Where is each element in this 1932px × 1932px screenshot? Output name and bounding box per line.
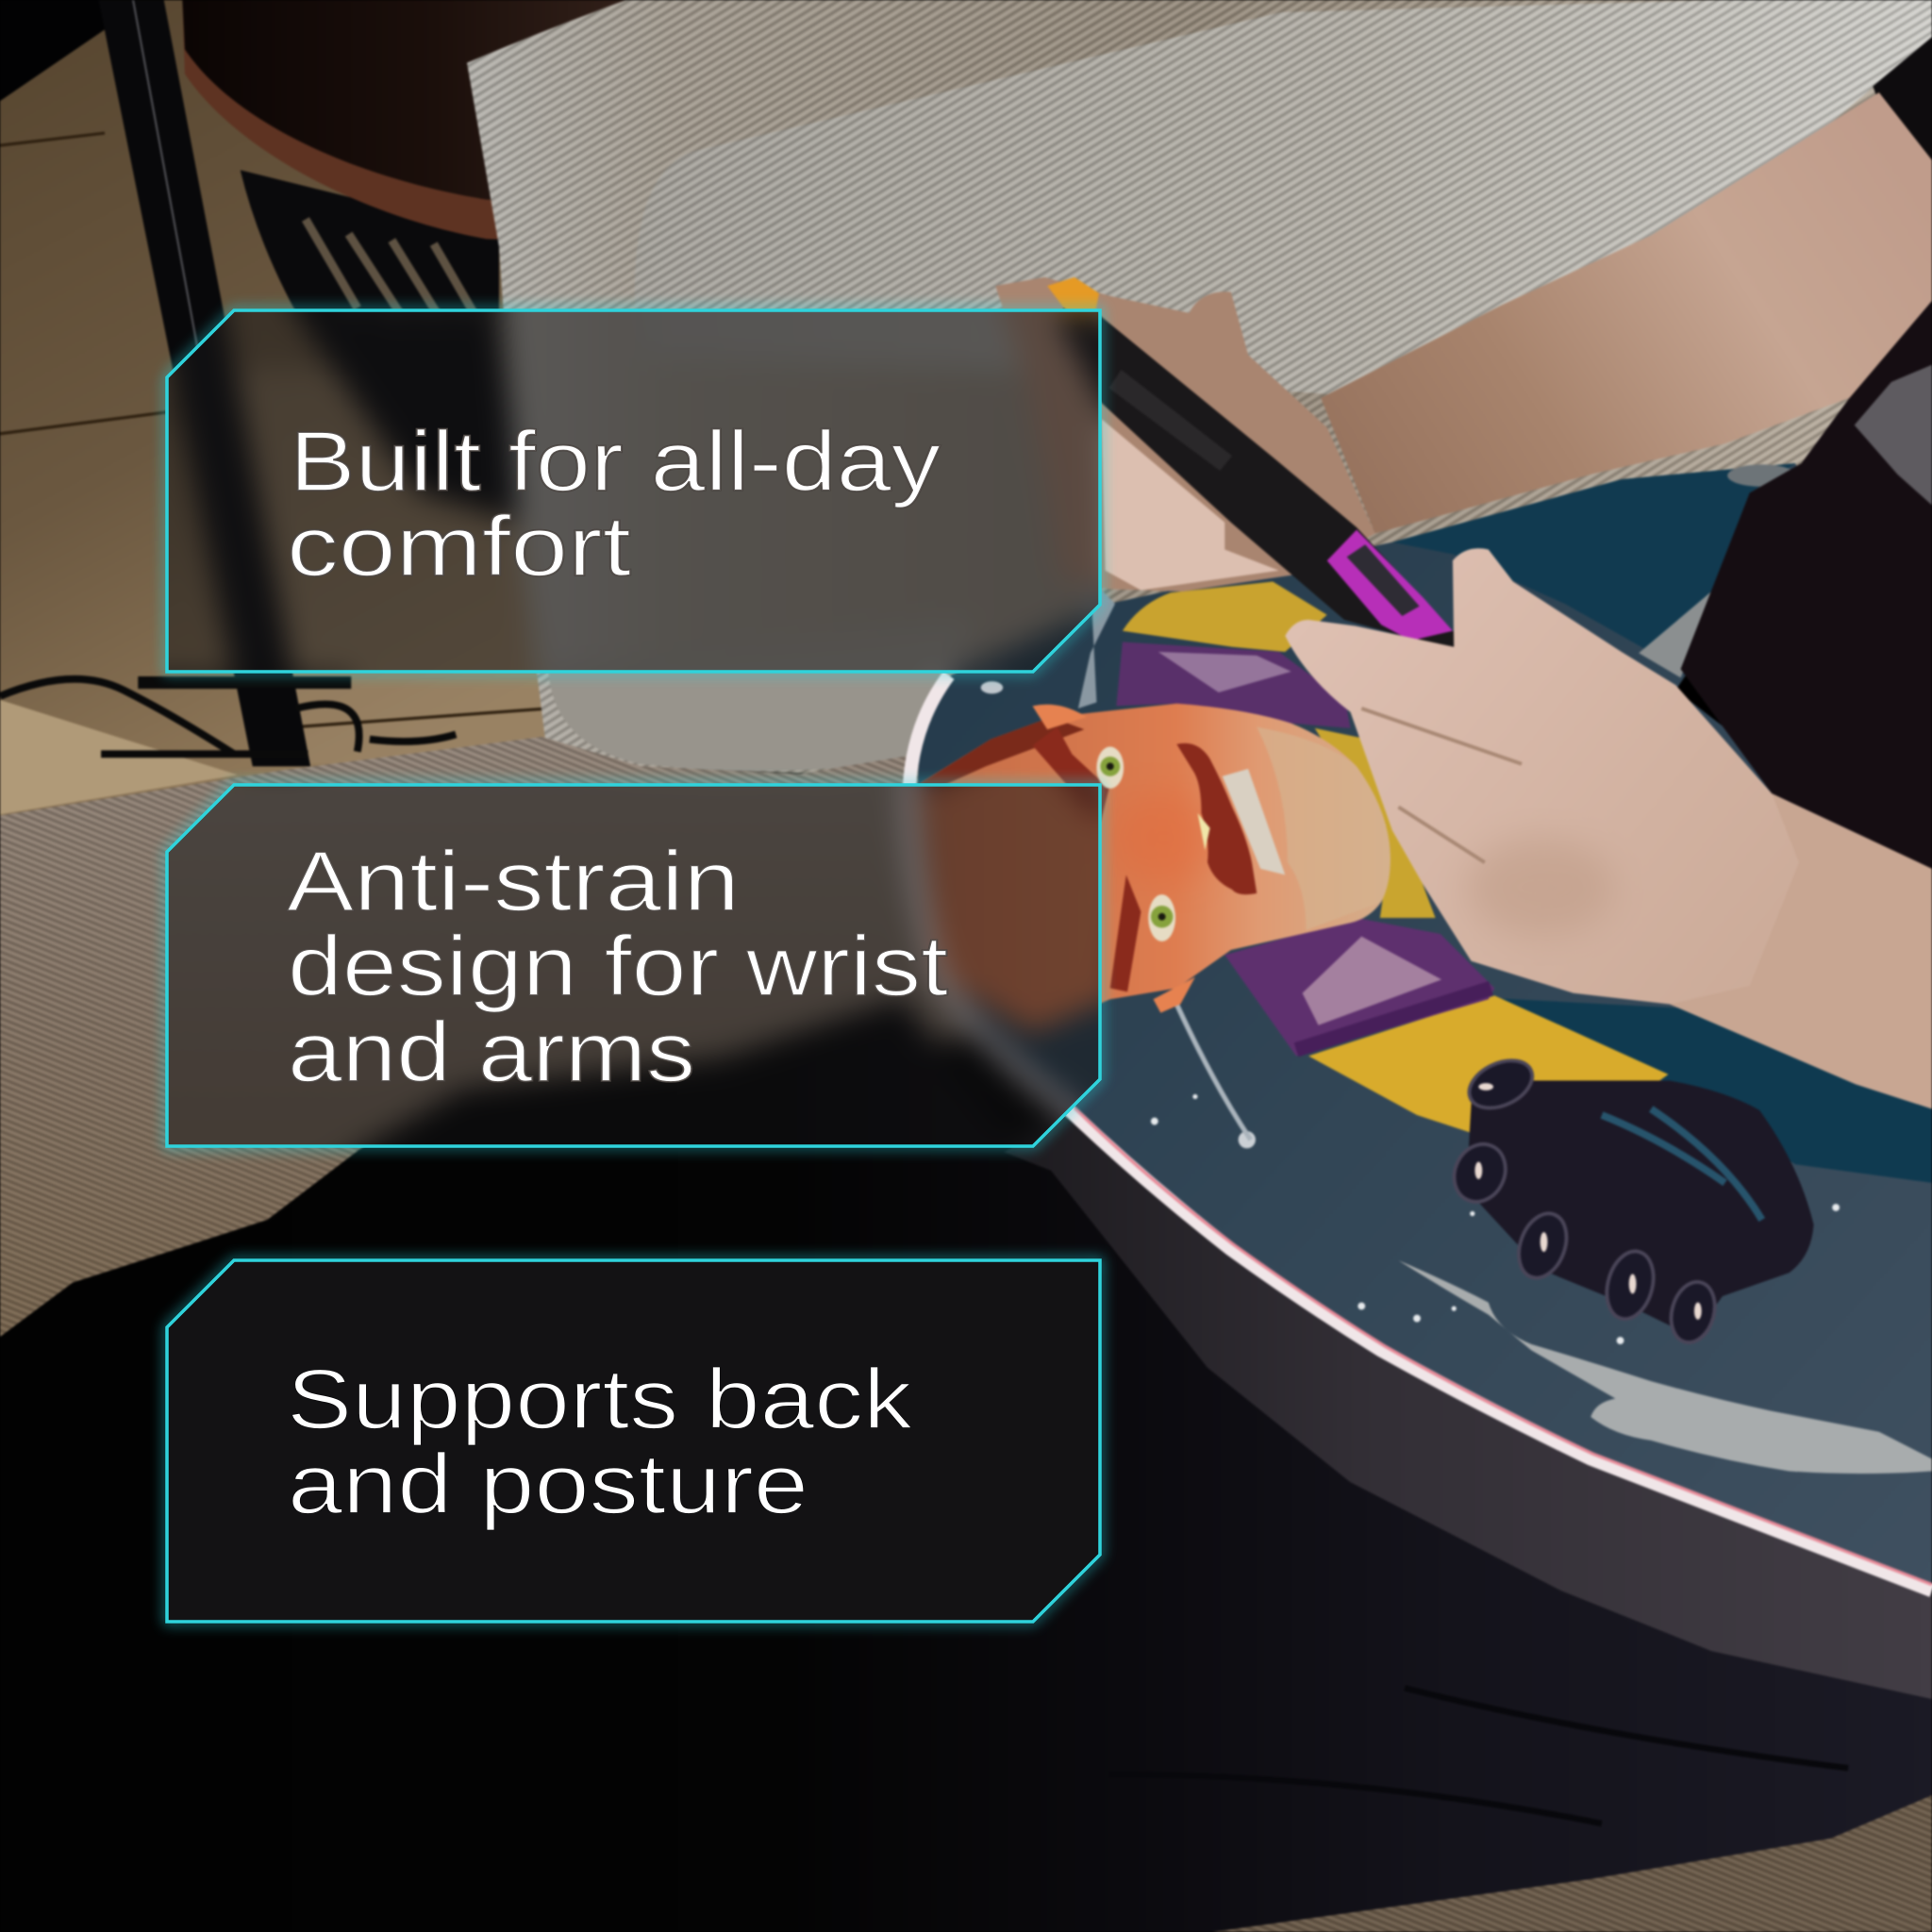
- brow: [1033, 727, 1109, 823]
- dark corner at top left: [0, 0, 105, 101]
- star print: [981, 579, 1840, 1344]
- grey dome on cushion: [1727, 464, 1796, 487]
- panel: anti-strain design: [156, 773, 1112, 1158]
- upper hand: [995, 277, 1375, 591]
- right eye: [1148, 894, 1175, 941]
- black shirt: [1681, 37, 1932, 869]
- text: built for all-day comfort: Built for all-day: [290, 415, 941, 509]
- floor tiles: [0, 0, 567, 862]
- pants: [0, 998, 1932, 1932]
- cushion body: [918, 463, 1932, 1591]
- left eye: [1096, 747, 1124, 789]
- cloud print: [1398, 1260, 1932, 1474]
- teeth: [1223, 769, 1285, 874]
- controller: [1047, 277, 1484, 658]
- text: supports back and posture: and posture: [288, 1438, 808, 1532]
- cushion trim: [909, 675, 1932, 1591]
- yellow collar: [1315, 728, 1436, 918]
- text: anti-strain design for wrist and arms: [287, 835, 948, 1100]
- text: anti-strain design for wrist and arms: Anti-strain: [287, 835, 740, 929]
- cheek red: [1112, 791, 1216, 885]
- lower hand: [1285, 548, 1799, 1004]
- fingers below controller: [1102, 419, 1279, 591]
- purple vest top: [1116, 641, 1351, 728]
- nose highlight: [1198, 813, 1210, 850]
- upper forearm: [1321, 92, 1932, 534]
- yellow sleeve top: [1123, 581, 1327, 652]
- table leg: [98, 0, 310, 766]
- sofa seat: [0, 737, 986, 1337]
- velvet cushion side: [1004, 1112, 1932, 1699]
- teal band behind hands: [1392, 463, 1795, 669]
- panel: supports back and posture: [160, 1255, 1113, 1632]
- text: supports back and posture: [287, 1353, 913, 1532]
- lower forearm: [1651, 793, 1932, 1109]
- mustache: [1176, 743, 1257, 894]
- panel: all-day comfort: [155, 298, 1112, 684]
- chin highlight: [1257, 727, 1391, 930]
- pillow base: [548, 616, 974, 771]
- yellow sleeve lower: [1308, 995, 1668, 1158]
- purple vest lower: [1224, 918, 1494, 1056]
- round side table: [182, 0, 641, 242]
- sofa corner at bottom right: [1212, 1795, 1932, 1932]
- teal band under forearm: [1491, 998, 1932, 1183]
- illustrated face: [918, 704, 1391, 1033]
- knuckle shading: [1466, 838, 1614, 937]
- text: built for all-day comfort: comfort: [287, 500, 631, 594]
- front cushion: [635, 0, 1932, 394]
- text: anti-strain design for wrist and arms: design for wrist: [288, 920, 948, 1014]
- pants creases: [1109, 1688, 1848, 1824]
- text: built for all-day comfort: [287, 415, 941, 594]
- sofa back cushion: [467, 0, 1932, 789]
- grey wedge by shirt: [1639, 585, 1719, 677]
- lower brow: [1110, 874, 1141, 991]
- finger shading: [1361, 708, 1522, 862]
- text: supports back and posture: Supports back: [287, 1353, 913, 1447]
- floor cables: [0, 679, 456, 754]
- text: anti-strain design for wrist and arms: and arms: [288, 1006, 695, 1100]
- basket under table: [241, 170, 524, 524]
- black glove: [1445, 1051, 1814, 1347]
